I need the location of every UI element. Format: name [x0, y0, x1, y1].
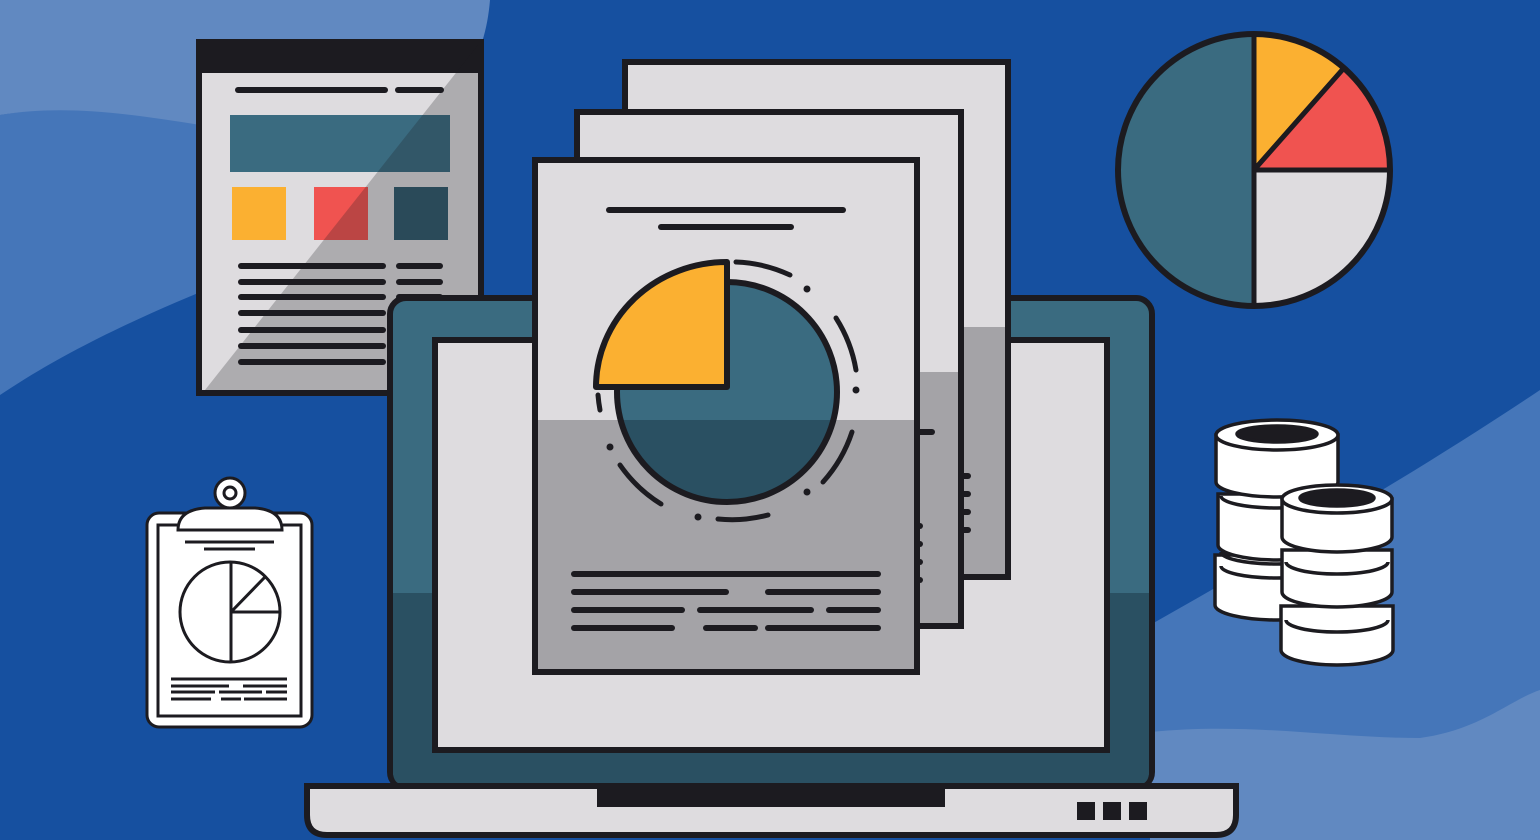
front pie chart	[596, 262, 860, 520]
left web document	[199, 42, 481, 393]
laptop base	[307, 786, 1236, 835]
left stack	[1215, 420, 1339, 620]
right stack	[1281, 485, 1393, 665]
front document with pie	[535, 160, 917, 672]
laptop	[307, 298, 1236, 835]
icon: clipboard	[147, 478, 312, 727]
back document	[625, 62, 1008, 577]
icon: database stacks	[1215, 420, 1393, 665]
document stack	[535, 62, 1008, 672]
middle document	[577, 112, 961, 626]
big pie chart	[1118, 34, 1390, 306]
